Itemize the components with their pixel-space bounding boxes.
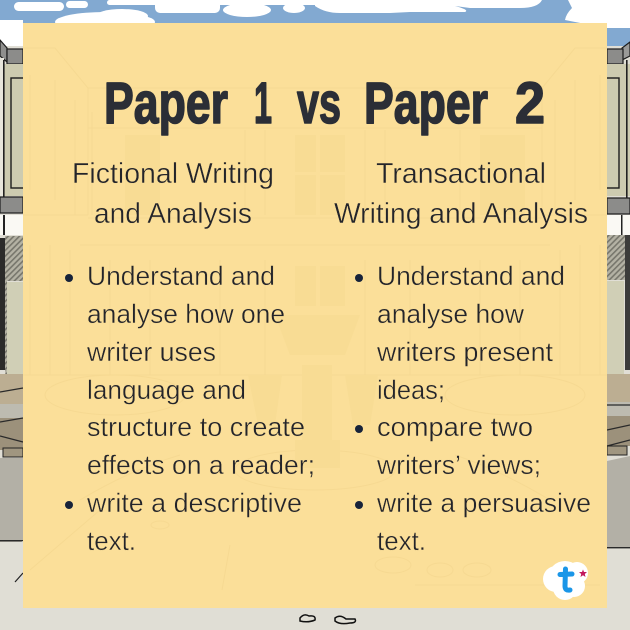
left building strip [0,40,24,630]
title [104,71,545,136]
text block: Paper 2 bullets: Understand and [377,261,565,291]
heading: Paper 2 subtitle: Writing and Analysis [334,198,588,230]
heading: Paper 1 subtitle: Fictional Writing [72,158,274,190]
title: Paper [104,71,228,136]
text block: Paper 1 bullets: analyse how one [87,299,285,329]
text block: Paper 2 bullets: analyse how [377,299,524,329]
faded building illustration [23,48,607,590]
text block: Paper 1 bullets [65,261,315,556]
heading: Paper 2 subtitle [334,158,588,230]
text block: Paper 1 bullets: effects on a reader; [87,450,315,480]
heading: Paper 1 subtitle: and Analysis [94,198,252,230]
text block: Paper 1 bullets: structure to create [87,412,305,442]
heading: Paper 2 subtitle: Transactional [376,158,546,190]
text block: Paper 2 bullets: ideas; [377,375,445,405]
text block: Paper 2 bullets: writers’ views; [376,450,541,480]
text block: Paper 1 bullets: writer uses [86,337,216,367]
title: 1 [254,71,272,136]
sky with clouds [0,0,630,46]
title: vs [297,71,341,136]
text block: Paper 2 bullets: writers present [376,337,553,367]
text block: Paper 2 bullets: write a persuasive [376,488,591,518]
text block: Paper 1 bullets: write a descriptive [86,488,302,518]
text block: Paper 1 bullets: Understand and [87,261,275,291]
right building strip [606,42,630,548]
text block: Paper 1 bullets: language and [87,375,246,405]
text block: Paper 2 bullets: text. [377,526,426,556]
title: 2 [515,71,545,136]
title: Paper [364,71,488,136]
heading: Paper 1 subtitle [72,158,274,230]
text block: Paper 2 bullets [355,261,591,556]
icon: Twinkl logo [543,561,588,600]
pebbles below panel [300,615,355,624]
text block: Paper 1 bullets: text. [87,526,136,556]
text block: Paper 2 bullets: compare two [377,412,533,442]
